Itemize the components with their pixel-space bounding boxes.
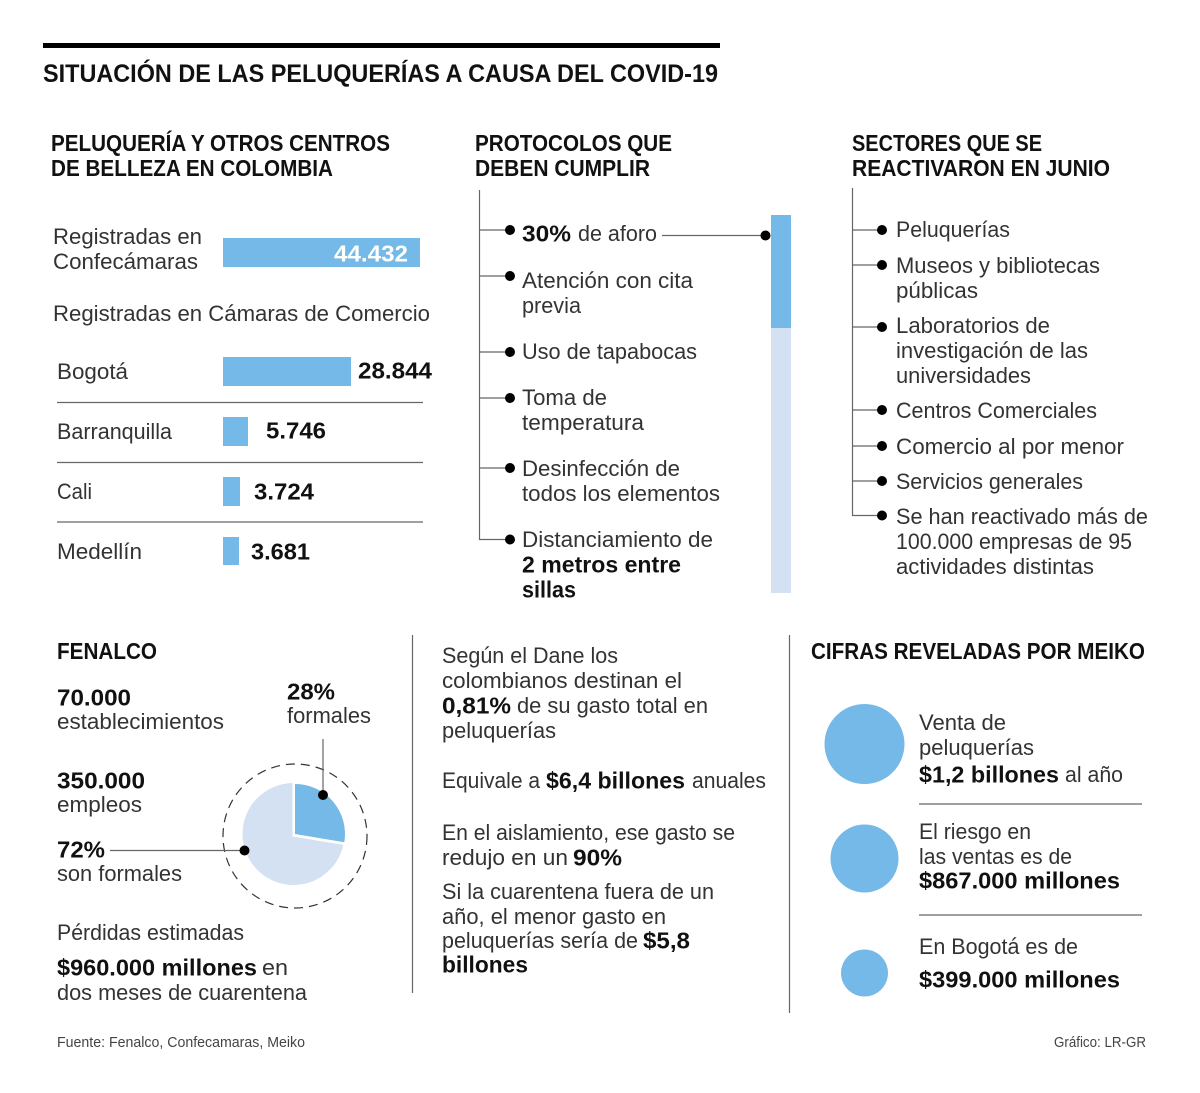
heading: sectores que se reactivaron: REACTIVARON EN JUNIO <box>852 155 1110 181</box>
row: Confecámaras: 44.432 <box>334 241 408 267</box>
item: peluquerías: Peluquerías <box>896 217 1010 242</box>
item: comercio: Comercio al por menor <box>896 434 1124 459</box>
item: empresas reactivadas <box>896 504 1148 579</box>
bubble: riesgo en ventas: El riesgo en <box>919 819 1031 844</box>
row: Confecámaras: Registradas en <box>53 224 202 249</box>
bubble: venta de peluquerías: $1,2 billones <box>919 762 1059 788</box>
text: aislamiento: En el aislamiento, ese gasto se <box>442 820 735 845</box>
heading: peluquería y otros centros <box>51 129 390 181</box>
item: servicios: Servicios generales <box>896 469 1083 494</box>
item: distanciamiento: 2 metros entre <box>522 552 681 578</box>
text: gasto total: Según el Dane los <box>442 643 618 668</box>
stat: establecimientos <box>57 685 224 734</box>
row: Confecámaras <box>53 224 420 274</box>
heading: protocolos que deben cumplir <box>475 130 672 181</box>
row: Cali: Cali <box>57 479 92 504</box>
stat: 72% son formales <box>57 837 182 886</box>
heading: cifras reveladas por Meiko: CIFRAS REVELADAS POR MEIKO <box>811 638 1145 664</box>
credit: Gráfico: LR-GR <box>1054 1034 1146 1051</box>
row: Barranquilla <box>57 417 326 446</box>
item: cita previa: Atención con cita <box>522 268 693 293</box>
stat: empleos: 350.000 <box>57 768 145 794</box>
heading: sectores que se reactivaron <box>852 130 1110 181</box>
stat: establecimientos: establecimientos <box>57 709 224 734</box>
bubble: venta de peluquerías: Venta de <box>919 710 1006 735</box>
text: gasto total <box>442 643 708 743</box>
text: cuarentena: peluquerías sería de <box>442 928 638 953</box>
row: Barranquilla: Barranquilla <box>57 419 172 444</box>
text: cuarentena <box>442 879 714 978</box>
text: pérdidas estimadas: Pérdidas estimadas <box>57 920 244 945</box>
stat: 28% formales <box>287 679 371 728</box>
source note: Fuente: Fenalco, Confecamaras, Meiko <box>57 1034 305 1051</box>
title: SITUACIÓN DE LAS PELUQUERÍAS A CAUSA DEL COVID-19 <box>43 58 718 88</box>
item: empresas reactivadas: 100.000 empresas de 95 <box>896 529 1132 554</box>
bubble: Bogotá <box>841 934 1120 996</box>
item: cita previa <box>522 268 693 318</box>
item: empresas reactivadas: actividades distintas <box>896 554 1094 579</box>
item: desinfección: todos los elementos <box>522 481 720 506</box>
item: cita previa: previa <box>522 293 581 318</box>
stat: 28% formales: 28% <box>287 679 335 705</box>
item: empresas reactivadas: Se han reactivado más de <box>896 504 1148 529</box>
item: distanciamiento: sillas <box>522 577 576 603</box>
item: tapabocas: Uso de tapabocas <box>522 339 697 364</box>
panel: Fenalco <box>57 638 371 1005</box>
text: gasto total: 0,81% <box>442 693 511 719</box>
stat: establecimientos: 70.000 <box>57 685 131 711</box>
text: cuarentena: $5,8 <box>643 928 690 954</box>
row: Medellín: 3.681 <box>251 539 310 565</box>
item: laboratorios <box>896 313 1088 388</box>
text: aislamiento <box>442 820 735 871</box>
item: laboratorios: universidades <box>896 363 1031 388</box>
text: gasto total: colombianos destinan el <box>442 668 682 693</box>
bubble: venta de peluquerías: al año <box>1065 762 1123 787</box>
heading: protocolos que deben cumplir: PROTOCOLOS QUE <box>475 130 672 156</box>
text: aislamiento: 90% <box>573 845 622 871</box>
heading: Fenalco: FENALCO <box>57 638 157 664</box>
item: museos: Museos y bibliotecas <box>896 253 1100 278</box>
text: pérdidas estimadas: en <box>262 955 288 980</box>
row: Medellín <box>57 537 310 565</box>
item: museos: públicas <box>896 278 978 303</box>
item: desinfección: Desinfección de <box>522 456 680 481</box>
item: temperatura <box>522 385 644 435</box>
row: Bogotá: 28.844 <box>358 358 432 384</box>
text: equivale: anuales <box>692 768 766 793</box>
panel: protocolos <box>475 130 791 603</box>
heading: peluquería y otros centros: PELUQUERÍA Y OTROS CENTROS <box>51 129 390 156</box>
row: Bogotá: Bogotá <box>57 359 128 384</box>
row: Medellín: Medellín <box>57 539 142 564</box>
text: pérdidas estimadas: dos meses de cuarentena <box>57 980 307 1005</box>
stat: 72% son formales: 72% <box>57 837 105 863</box>
row: Confecámaras: Confecámaras <box>53 249 198 274</box>
text: pérdidas estimadas: $960.000 millones <box>57 955 257 981</box>
heading: protocolos que deben cumplir: DEBEN CUMPLIR <box>475 155 650 181</box>
panel: centros de belleza en Colombia <box>51 129 432 565</box>
item: aforo: de aforo <box>578 221 657 246</box>
stat: 28% formales: formales <box>287 703 371 728</box>
tree connector <box>852 188 887 520</box>
subheading: cámaras de comercio: Registradas en Cámaras de Comercio <box>53 301 430 326</box>
tree connector <box>480 190 515 544</box>
bubble: riesgo en ventas: las ventas es de <box>919 844 1072 869</box>
text: cuarentena: billones <box>442 952 528 978</box>
row: Barranquilla: 5.746 <box>266 418 326 444</box>
text: gasto total: de su gasto total en <box>517 693 708 718</box>
stat: 72% son formales: son formales <box>57 861 182 886</box>
panel: gasto según el Dane <box>442 643 766 978</box>
bubble: riesgo en ventas <box>830 819 1120 894</box>
heading: sectores que se reactivaron: SECTORES QUE SE <box>852 130 1042 156</box>
bubble: Bogotá: En Bogotá es de <box>919 934 1078 959</box>
bubble: venta de peluquerías: peluquerías <box>919 735 1034 760</box>
item: museos <box>896 253 1100 303</box>
text: equivale: Equivale a <box>442 768 540 793</box>
item: centros comerciales: Centros Comerciales <box>896 398 1097 423</box>
text: gasto total: peluquerías <box>442 718 556 743</box>
text: cuarentena: año, el menor gasto en <box>442 904 666 929</box>
item: laboratorios: Laboratorios de <box>896 313 1050 338</box>
stat: empleos <box>57 768 145 817</box>
bubble: venta de peluquerías <box>824 704 1123 788</box>
panel: cifras Meiko <box>811 638 1145 996</box>
heading: peluquería y otros centros: DE BELLEZA EN COLOMBIA <box>51 155 333 181</box>
row: Cali: 3.724 <box>254 479 314 505</box>
row: Bogotá <box>57 357 432 386</box>
bubble: riesgo en ventas: $867.000 millones <box>919 868 1120 894</box>
text: cuarentena: Si la cuarentena fuera de un <box>442 879 714 904</box>
row: Cali <box>57 477 314 506</box>
pie chart: formalidad <box>110 739 367 908</box>
item: distanciamiento: Distanciamiento de <box>522 527 713 552</box>
item: distanciamiento <box>522 527 713 603</box>
chart: 30% capacity bar <box>662 215 791 593</box>
item: aforo: 30% <box>522 221 571 247</box>
text: equivale <box>442 768 766 794</box>
item: desinfección <box>522 456 720 506</box>
item: temperatura: Toma de <box>522 385 607 410</box>
panel: sectores <box>852 130 1148 579</box>
item: temperatura: temperatura <box>522 410 644 435</box>
item: aforo <box>522 221 657 247</box>
text: equivale: $6,4 billones <box>546 768 685 794</box>
stat: empleos: empleos <box>57 792 142 817</box>
text: aislamiento: redujo en un <box>442 845 568 870</box>
text: pérdidas estimadas <box>57 920 307 1005</box>
item: laboratorios: investigación de las <box>896 338 1088 363</box>
title <box>43 43 720 88</box>
bubble: Bogotá: $399.000 millones <box>919 967 1120 993</box>
